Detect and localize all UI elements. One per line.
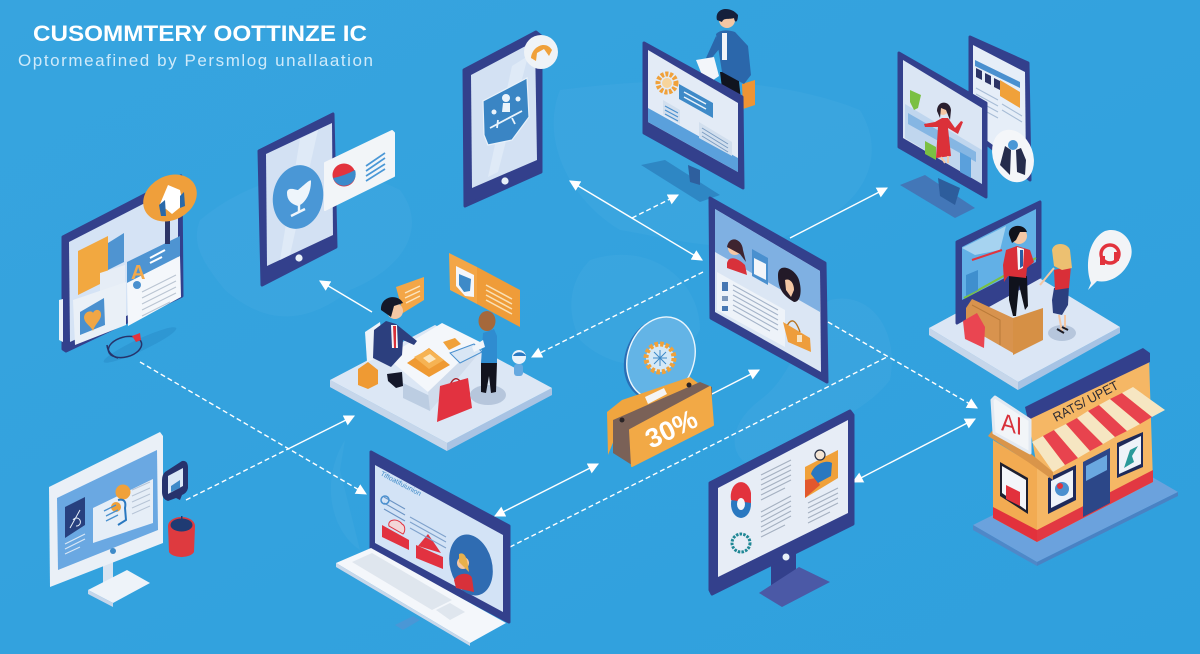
poster: window left — [1048, 465, 1076, 514]
icon: gear — [658, 74, 676, 92]
title: CUSOMMTERY OOTTINZE IC — [33, 21, 367, 46]
panel: top monitor — [641, 43, 743, 202]
woman in blue — [470, 311, 506, 405]
avatar: woman with dark hair — [778, 268, 801, 302]
white card with heart — [73, 282, 126, 345]
icon: red cup — [168, 516, 195, 557]
panel: bottom-left white monitor — [49, 432, 163, 607]
icon: white circle avatar — [985, 124, 1041, 188]
panel: desk platform — [330, 253, 552, 451]
arrow: solid end to desk — [290, 416, 354, 448]
panel: tablet with glass icon — [259, 114, 394, 285]
red shopping bag — [437, 378, 472, 422]
red alert panels — [382, 520, 443, 569]
home button — [295, 254, 303, 262]
arrows and connectors — [140, 181, 977, 547]
gear icon — [732, 534, 750, 552]
panel: person behind top monitor — [696, 9, 755, 109]
arrow: box to centre monitor — [712, 370, 759, 394]
panel: left monitor — [59, 165, 205, 367]
arrow: laptop to box — [495, 464, 598, 516]
icon: red bag — [963, 313, 985, 348]
chair — [365, 322, 384, 362]
subtitle: Optormeafined by Persmlog unallaation — [18, 51, 373, 70]
chat card — [93, 479, 153, 543]
poster: bag — [1000, 462, 1028, 514]
panel: storefront — [973, 348, 1178, 566]
orange bag — [358, 362, 378, 389]
roof band — [1025, 348, 1150, 420]
panel: discount box — [607, 307, 713, 466]
striped awning — [1032, 387, 1165, 472]
panel: laptop — [336, 452, 509, 646]
avatar: woman with blond hair — [727, 239, 747, 275]
stand — [900, 175, 975, 218]
stacked orange product — [407, 348, 450, 377]
AI sign: AI — [1001, 408, 1022, 441]
portrait panel — [805, 450, 838, 498]
arrow: centre monitor to top-right monitor — [790, 188, 887, 238]
arrow: bottom-left monitor to desk — [186, 448, 290, 500]
speech note — [396, 277, 424, 313]
floating chart card — [325, 131, 394, 210]
arrow: desk to tablet — [320, 281, 372, 312]
message card — [679, 84, 713, 118]
dark tablet thumbnail — [65, 497, 85, 554]
panel: top tablet — [464, 32, 558, 206]
icon: orange avatar badge — [135, 165, 205, 244]
briefcase — [742, 80, 755, 109]
icon: support speech bubble — [1088, 230, 1132, 290]
man in red jacket — [1003, 226, 1034, 316]
icon: cable — [106, 333, 144, 361]
building front wall — [1028, 358, 1153, 542]
building left wall — [993, 440, 1037, 542]
keyboard — [336, 548, 506, 646]
arrow: monitor to store — [853, 419, 975, 482]
front monitor — [899, 53, 986, 197]
panel: centre monitor — [710, 198, 827, 382]
phone icon — [752, 249, 768, 285]
door — [1083, 448, 1110, 517]
faint world map — [197, 81, 892, 550]
icon: badge — [524, 35, 558, 69]
arrow: dashed left monitor to laptop — [140, 362, 366, 494]
icon: heart glass — [268, 161, 328, 233]
poster: window right — [1117, 432, 1143, 478]
man in suit — [373, 297, 417, 388]
profile card — [127, 236, 181, 326]
icon: shopping bag — [783, 321, 811, 352]
table — [386, 323, 480, 411]
panel: bottom-right monitor — [710, 411, 853, 607]
blue content block — [108, 233, 124, 270]
screen heading: Tiftoatifuiunion — [379, 471, 422, 498]
backdrop screen — [957, 202, 1040, 323]
panel: top-right screens — [899, 37, 1041, 218]
woman with blond hair — [1040, 244, 1076, 341]
orange panel — [449, 253, 520, 327]
back tablet — [970, 37, 1030, 180]
store sign text: RATS/ UPET — [1050, 378, 1121, 425]
arrow: dashed centre monitor to store — [828, 322, 977, 408]
arrow: long dashed laptop to junction — [510, 357, 887, 547]
arrow: dashed centre monitor to desk — [532, 272, 703, 357]
text card — [717, 272, 785, 347]
icon: image speech bubble — [162, 461, 188, 501]
glass ellipse — [613, 307, 706, 410]
arrow: dashed to top monitor — [632, 195, 678, 218]
icon: green shield — [910, 90, 921, 110]
AI sign — [992, 397, 1030, 453]
small robot — [512, 350, 526, 376]
discount value: 30% — [640, 404, 702, 454]
avatar circle — [443, 530, 499, 600]
woman in red dress — [924, 103, 963, 163]
icon: team hexagon — [483, 78, 529, 145]
orange content block — [78, 236, 108, 295]
wooden counter — [966, 299, 1043, 355]
profile card: A — [131, 262, 145, 284]
panel: customer service platform — [929, 202, 1132, 390]
arrow: tablet to centre monitor — [570, 181, 702, 260]
donut icon — [731, 482, 751, 518]
